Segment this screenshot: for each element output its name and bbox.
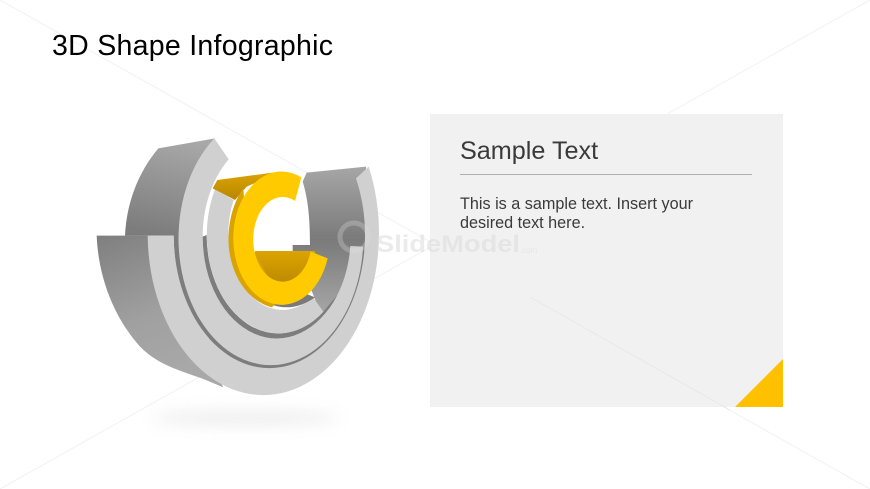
outer light ring xyxy=(148,167,379,395)
diagonal line over panel xyxy=(530,297,730,410)
right dark wall xyxy=(293,167,367,313)
watermark: SlideModel xyxy=(376,231,520,258)
yellow inner shading bottom xyxy=(255,251,315,288)
inner light ring xyxy=(207,189,323,333)
panel body text: This is a sample text. Insert your xyxy=(460,195,694,213)
gap shadow outer xyxy=(174,235,365,369)
panel: sample text xyxy=(430,114,783,407)
watermark: .com xyxy=(520,246,538,255)
upper dark wall xyxy=(125,138,215,236)
3D ring graphic xyxy=(97,138,379,395)
title: 3D Shape Infographic xyxy=(52,30,333,62)
panel body text: desired text here. xyxy=(460,214,585,232)
gap shadow inner xyxy=(203,235,337,338)
yellow C face xyxy=(233,172,328,305)
shadow under yellow C xyxy=(247,283,315,307)
panel heading: Sample Text xyxy=(460,137,598,165)
watermark xyxy=(340,223,538,258)
yellow inner shading top xyxy=(213,172,280,200)
ground shadow xyxy=(150,412,340,424)
yellow C side edge xyxy=(228,188,280,307)
corner triangle xyxy=(735,359,783,407)
middle light ring xyxy=(179,138,363,365)
outer left dark wall xyxy=(97,236,223,387)
